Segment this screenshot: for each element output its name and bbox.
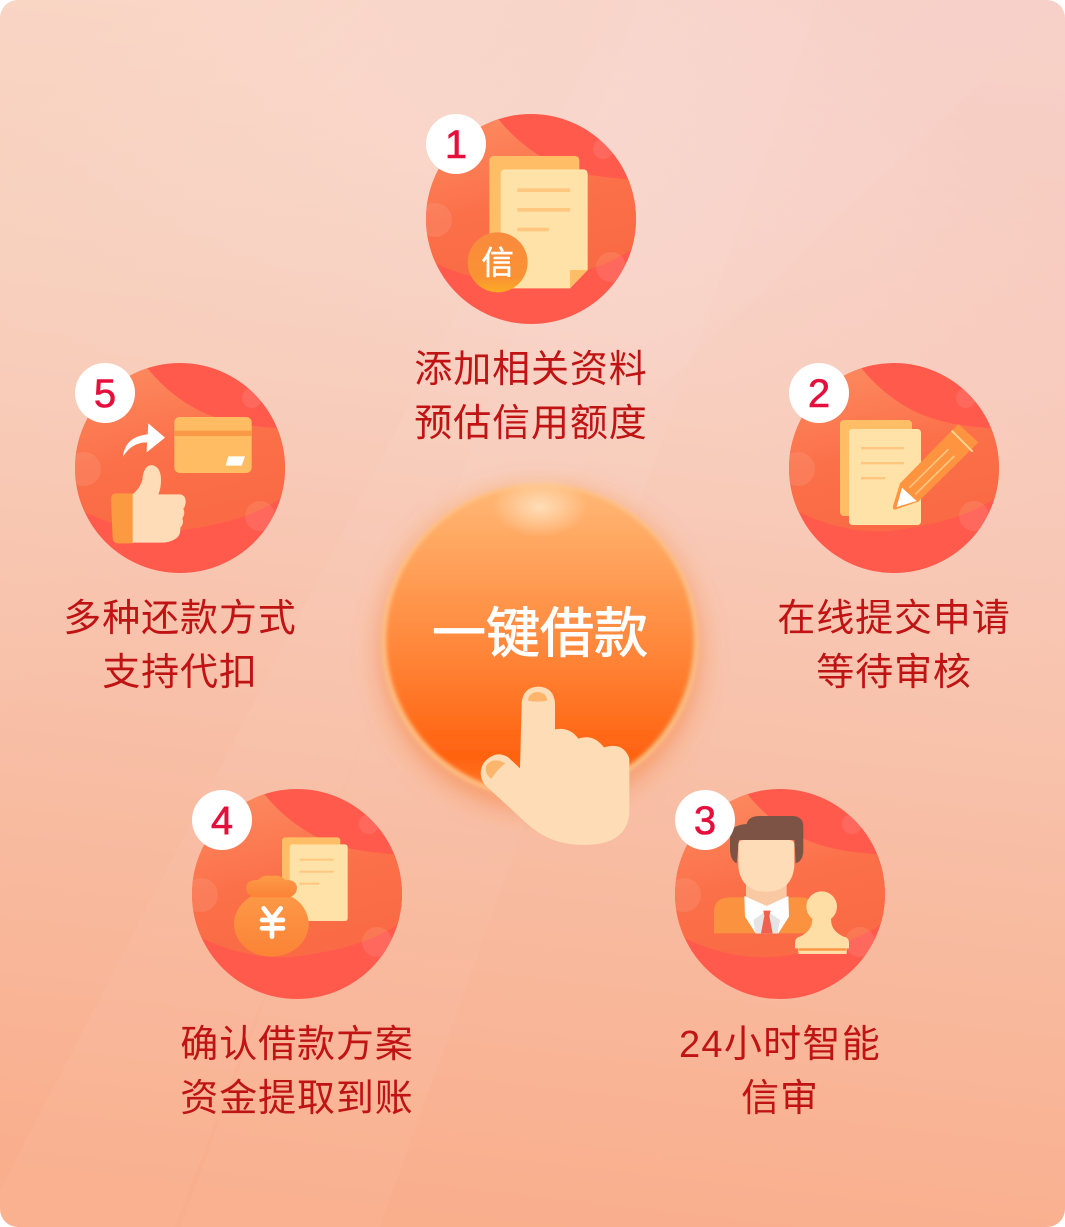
caption 4: 确认借款方案 (180, 1024, 414, 1066)
caption 5: 支持代扣 (102, 652, 258, 694)
step 3 disc (667, 789, 890, 999)
step 2 (777, 363, 1011, 694)
step 5 (63, 363, 297, 694)
button label: 一键借款 (432, 604, 648, 664)
number badge 5: 5 (94, 372, 116, 416)
icon: document with credit badge: 信 (481, 244, 514, 281)
icon: reviewer with stamp (714, 816, 849, 954)
number badge 2 (789, 363, 849, 423)
icon: document with credit badge (468, 156, 588, 292)
caption 2: 在线提交申请 (777, 598, 1011, 640)
central button (382, 477, 698, 808)
caption 1: 添加相关资料 (414, 349, 648, 391)
step 5 disc (67, 363, 290, 573)
caption 2: 等待审核 (816, 652, 972, 694)
step 3 (667, 789, 890, 1120)
number badge 1 (426, 114, 486, 174)
step 1 (414, 114, 648, 445)
step 2 disc (781, 363, 1004, 573)
step 1 disc (418, 114, 641, 324)
step 4 disc (184, 789, 407, 999)
caption 5: 多种还款方式 (63, 598, 297, 640)
icon: money bag and document (234, 837, 348, 957)
number badge 2: 2 (808, 372, 830, 416)
number badge 4: 4 (211, 799, 233, 843)
caption 3: 信审 (741, 1078, 819, 1120)
caption 3: 24小时智能 (679, 1024, 881, 1066)
caption 4: 资金提取到账 (180, 1078, 414, 1120)
step 4 (180, 789, 414, 1120)
number badge 1: 1 (445, 123, 467, 167)
icon: thumbs up, arrow and bank card (111, 417, 252, 543)
number badge 3 (675, 790, 735, 850)
number badge 4 (192, 790, 252, 850)
number badge 5 (75, 363, 135, 423)
icon: pointing hand (481, 687, 629, 845)
icon: document with pencil (840, 420, 978, 525)
caption 1: 预估信用额度 (414, 403, 648, 445)
number badge 3: 3 (694, 799, 716, 843)
